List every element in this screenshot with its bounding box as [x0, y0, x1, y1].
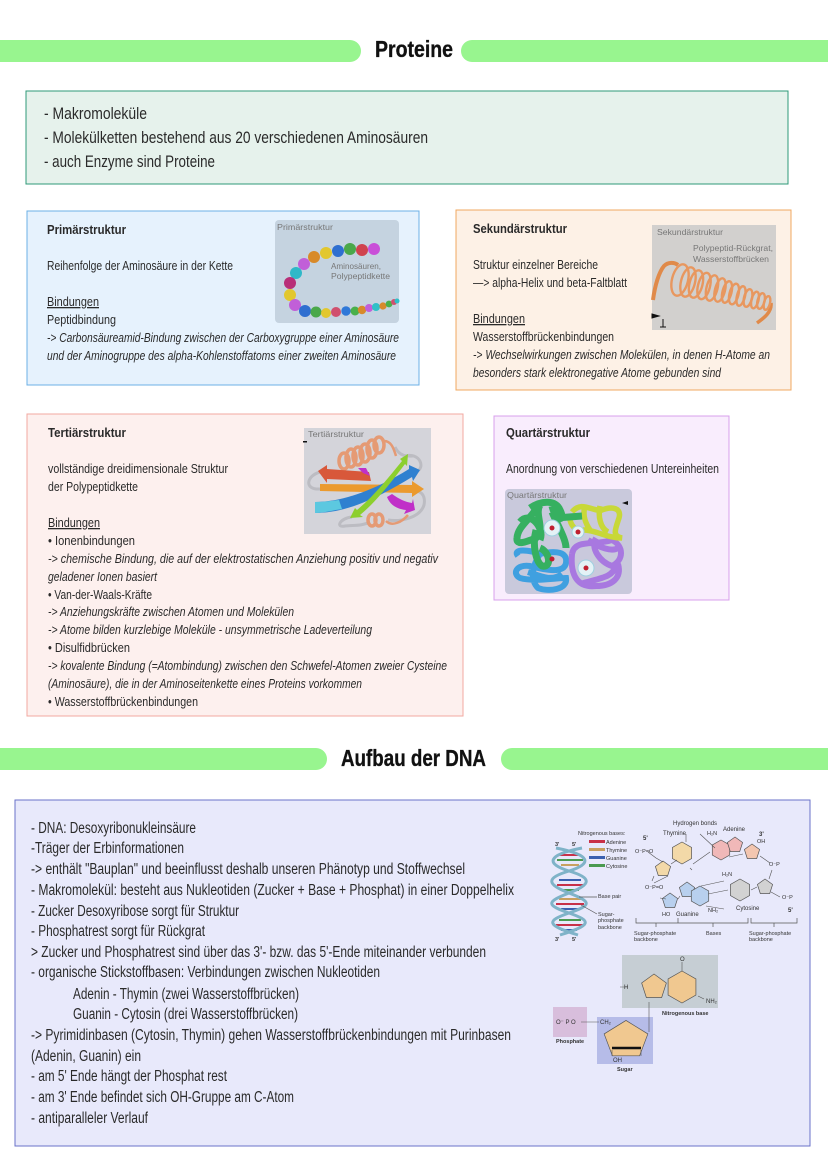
- text block: DNA facts: [31, 820, 514, 1127]
- image: amino acid chain: Primärstruktur: [277, 222, 333, 232]
- panel: Tertiärstruktur: -> kovalente Bindung (=Atombindung) zwischen den Schwefel-Atomen zweier Cysteine: [48, 658, 447, 673]
- panel: Quartärstruktur: Anordnung von verschiedenen Untereinheiten: [506, 461, 719, 476]
- panel: Tertiärstruktur: • Ionenbindungen: [48, 533, 135, 548]
- diagram: DNA double helix: Guanine: [606, 856, 627, 862]
- panel: Quartärstruktur: [494, 416, 729, 600]
- panel: Tertiärstruktur: -> chemische Bindung, die auf der elektrostatischen Anziehung positiv und negativ: [48, 551, 439, 566]
- panel: Sekundärstruktur: Wasserstoffbrückenbindungen: [473, 329, 614, 344]
- panel: Tertiärstruktur: Tertiärstruktur: [48, 425, 126, 440]
- image: quaternary protein: Quartärstruktur: [507, 490, 567, 500]
- diagram: nucleotide structure: H: [624, 985, 628, 991]
- diagram: base pairing chemistry: Bases: [706, 931, 722, 937]
- image: tertiary protein ribbon: Tertiärstruktur: [308, 429, 364, 439]
- diagram: base pairing chemistry: OH: [757, 839, 765, 845]
- text block: DNA facts: - antiparalleler Verlauf: [31, 1110, 149, 1127]
- panel: Tertiärstruktur: Bindungen: [48, 515, 100, 530]
- diagram: DNA double helix: Cytosine: [606, 864, 627, 870]
- image: amino acid chain: [275, 220, 400, 323]
- diagram: DNA double helix: 5': [572, 842, 577, 848]
- text block: DNA facts: - DNA: Desoxyribonukleinsäure: [31, 820, 196, 837]
- diagram: DNA double helix: 3': [555, 842, 560, 848]
- panel: Tertiärstruktur: • Wasserstoffbrückenbindungen: [48, 694, 198, 709]
- image: alpha helix: Wasserstoffbrücken: [693, 254, 769, 264]
- diagram: DNA double helix: Thymine: [606, 848, 627, 854]
- image: tertiary protein ribbon: [303, 428, 431, 534]
- diagram: base pairing chemistry: 5': [788, 908, 793, 914]
- image: alpha helix: Polypeptid-Rückgrat,: [693, 243, 773, 253]
- diagram: base pairing chemistry: O⁻P=O: [635, 849, 654, 855]
- text block: DNA facts: > Zucker und Phosphatrest sind über das 3'- bzw. das 5'-Ende miteinander verbunden: [31, 944, 486, 961]
- diagram: DNA double helix: 5': [572, 937, 577, 943]
- panel: Primärstruktur: Peptidbindung: [47, 312, 116, 327]
- diagram: DNA double helix: Adenine: [606, 840, 626, 846]
- diagram: base pairing chemistry: HO: [662, 912, 671, 918]
- panel: introduction: - auch Enzyme sind Proteine: [44, 152, 215, 171]
- diagram: nucleotide structure: [553, 955, 718, 1073]
- diagram: base pairing chemistry: O⁻P: [782, 895, 793, 901]
- diagram: base pairing chemistry: H₂N: [722, 872, 732, 878]
- diagram: base pairing chemistry: [634, 821, 797, 943]
- diagram: base pairing chemistry: O⁻P: [769, 862, 780, 868]
- text block: DNA facts: - organische Stickstoffbasen: Verbindungen zwischen Nukleotiden: [31, 964, 380, 981]
- text block: DNA facts: -Träger der Erbinformationen: [31, 840, 184, 857]
- diagram: base pairing chemistry: Hydrogen bonds: [673, 821, 717, 827]
- text block: DNA facts: - Phosphatrest sorgt für Rückgrat: [31, 923, 206, 940]
- diagram: nucleotide structure: NH₂: [706, 999, 718, 1005]
- diagram: DNA double helix: [552, 831, 627, 943]
- panel: Primärstruktur: Primärstruktur: [47, 222, 126, 237]
- panel: Primärstruktur: -> Carbonsäureamid-Bindung zwischen der Carboxygruppe einer Aminosäure: [47, 330, 399, 345]
- diagram: DNA double helix: phosphate: [598, 918, 624, 924]
- diagram: DNA double helix: Sugar-: [598, 912, 615, 918]
- diagram: base pairing chemistry: O⁻P=O: [645, 885, 664, 891]
- diagram: base pairing chemistry: H₂N: [707, 831, 717, 837]
- text block: DNA facts: Guanin - Cytosin (drei Wasserstoffbrücken): [73, 1006, 298, 1023]
- panel: introduction: [26, 91, 788, 184]
- panel: Sekundärstruktur: besonders stark elektronegative Atome gebunden sind: [473, 365, 722, 380]
- diagram: base pairing chemistry: Sugar-phosphate: [634, 931, 676, 937]
- diagram: base pairing chemistry: Guanine: [676, 912, 699, 918]
- heading banner: Aufbau der DNA: Aufbau der DNA: [341, 745, 486, 771]
- text block: DNA facts: -> enthält "Bauplan" und beeinflusst deshalb unseren Phänotyp und Stoffwechsel: [31, 861, 465, 878]
- diagram: DNA double helix: Nitrogenous bases:: [578, 831, 626, 837]
- panel: Tertiärstruktur: (Aminosäure), die in der Aminoseitenkette eines Proteins vorkommen: [48, 676, 362, 691]
- image: amino acid chain: Polypeptidkette: [331, 271, 390, 281]
- diagram: base pairing chemistry: backbone: [749, 937, 773, 943]
- panel: Primärstruktur: Bindungen: [47, 294, 99, 309]
- diagram: DNA double helix: Base pair: [598, 894, 621, 900]
- panel: DNA: [15, 800, 810, 1146]
- diagram: base pairing chemistry: Sugar-phosphate: [749, 931, 791, 937]
- heading banner: Aufbau der DNA: [0, 745, 828, 771]
- panel: Tertiärstruktur: -> Anziehungskräfte zwischen Atomen und Molekülen: [48, 604, 294, 619]
- panel: Sekundärstruktur: [456, 210, 791, 390]
- panel: Sekundärstruktur: Bindungen: [473, 311, 525, 326]
- image: alpha helix: Sekundärstruktur: [657, 227, 723, 237]
- panel: Tertiärstruktur: • Disulfidbrücken: [48, 640, 130, 655]
- diagram: base pairing chemistry: Adenine: [723, 827, 746, 833]
- diagram: base pairing chemistry: 5': [643, 836, 648, 842]
- diagram: nucleotide structure: CH₂: [600, 1020, 612, 1026]
- panel: Primärstruktur: Reihenfolge der Aminosäure in der Kette: [47, 258, 233, 273]
- text block: DNA facts: - am 5' Ende hängt der Phosphat rest: [31, 1068, 228, 1085]
- diagram: base pairing chemistry: NH₂: [708, 908, 718, 914]
- heading banner: Proteine: Proteine: [375, 36, 453, 62]
- panel: introduction: - Molekülketten bestehend aus 20 verschiedenen Aminosäuren: [44, 128, 428, 147]
- diagram: DNA double helix: backbone: [598, 925, 622, 931]
- image: quaternary protein: [505, 489, 632, 594]
- text block: DNA facts: - Makromolekül: besteht aus Nukleotiden (Zucker + Base + Phosphat) in einer Doppelhelix: [31, 882, 514, 899]
- text block: DNA facts: -> Pyrimidinbasen (Cytosin, Thymin) gehen Wasserstoffbrückenbindungen mit Purinbasen: [31, 1027, 511, 1044]
- text block: DNA facts: (Adenin, Guanin) ein: [31, 1048, 141, 1065]
- diagram: base pairing chemistry: Thymine: [663, 831, 687, 837]
- panel: Quartärstruktur: Quartärstruktur: [506, 425, 590, 440]
- diagram: nucleotide structure: OH: [613, 1058, 622, 1064]
- panel: Sekundärstruktur: —> alpha-Helix und beta-Faltblatt: [473, 275, 627, 290]
- panel: Tertiärstruktur: vollständige dreidimensionale Struktur: [48, 461, 229, 476]
- diagram: nucleotide structure: Nitrogenous base: [662, 1011, 708, 1017]
- panel: Sekundärstruktur: Struktur einzelner Bereiche: [473, 257, 598, 272]
- diagram: base pairing chemistry: 3': [759, 832, 764, 838]
- diagram: base pairing chemistry: Cytosine: [736, 906, 760, 912]
- diagram: nucleotide structure: O: [680, 957, 685, 963]
- panel: Tertiärstruktur: geladener Ionen basiert: [48, 569, 158, 584]
- diagram: nucleotide structure: Sugar: [617, 1067, 633, 1073]
- panel: introduction: - Makromoleküle: [44, 104, 147, 123]
- diagram: base pairing chemistry: backbone: [634, 937, 658, 943]
- panel: Tertiärstruktur: der Polypeptidkette: [48, 479, 138, 494]
- text block: DNA facts: Adenin - Thymin (zwei Wasserstoffbrücken): [73, 986, 299, 1003]
- panel: Primärstruktur: und der Aminogruppe des alpha-Kohlenstoffatoms einer zweiten Aminosäure: [47, 348, 396, 363]
- text block: DNA facts: - am 3' Ende befindet sich OH-Gruppe am C-Atom: [31, 1089, 294, 1106]
- image: amino acid chain: Aminosäuren,: [331, 261, 381, 271]
- diagram: DNA double helix: 3': [555, 937, 560, 943]
- panel: Tertiärstruktur: • Van-der-Waals-Kräfte: [48, 587, 152, 602]
- panel: Tertiärstruktur: [27, 414, 463, 716]
- diagram: nucleotide structure: O⁻ P O: [556, 1020, 576, 1026]
- diagram: nucleotide structure: Phosphate: [556, 1039, 584, 1045]
- image: alpha helix: [652, 225, 776, 330]
- panel: Primärstruktur: [27, 211, 419, 385]
- heading banner: Proteine: [0, 36, 828, 62]
- text block: DNA facts: - Zucker Desoxyribose sorgt für Struktur: [31, 903, 239, 920]
- panel: Sekundärstruktur: Sekundärstruktur: [473, 221, 567, 236]
- panel: Tertiärstruktur: -> Atome bilden kurzlebige Moleküle - unsymmetrische Ladeverteilung: [48, 622, 373, 637]
